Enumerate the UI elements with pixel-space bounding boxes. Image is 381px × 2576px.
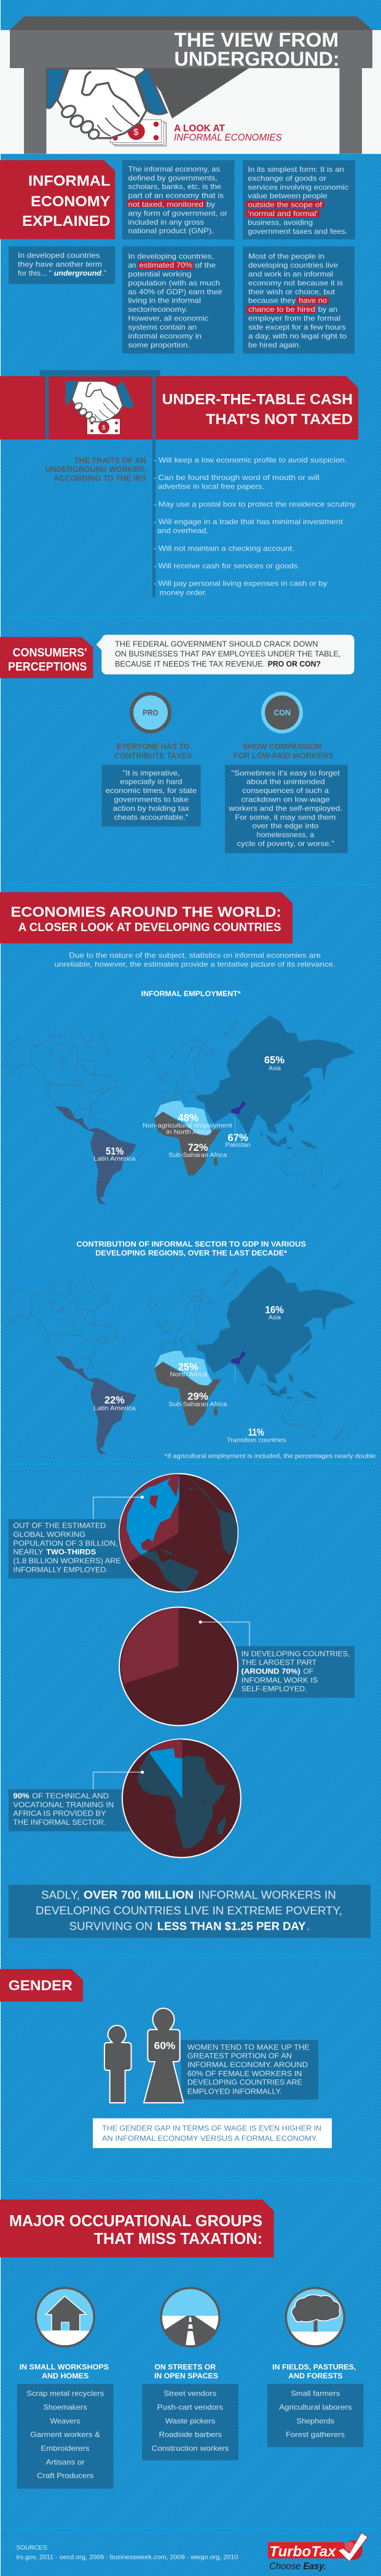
label: transition countries xyxy=(227,1427,286,1444)
column heading: streets xyxy=(154,2363,218,2380)
section: major occupational groups xyxy=(0,2200,364,2489)
callout text: two-thirds: (1.8 BILLION WORKERS) ARE xyxy=(13,1557,121,1565)
con heading: FOR LOW-PAID WORKERS xyxy=(234,751,334,760)
subtitle xyxy=(174,123,282,143)
panel: why people work informally: developing countries live xyxy=(248,261,338,269)
label: latin america: 22% xyxy=(104,1395,125,1406)
traits list xyxy=(154,455,357,597)
heading: THAT MISS TAXATION: xyxy=(94,2229,262,2248)
icon: man xyxy=(104,2025,132,2103)
traits label: UNDERGROUND WORKER, xyxy=(45,465,146,474)
label: latin america xyxy=(93,1146,136,1162)
heading: INFORMAL xyxy=(28,173,111,190)
icon: tree xyxy=(285,2287,345,2347)
panel: definition: by xyxy=(206,200,215,209)
panel: street occupations: Waste pickers xyxy=(165,2416,215,2425)
column heading: workshops: AND HOMES xyxy=(42,2372,88,2380)
callout text: two-thirds: INFORMALLY EMPLOYED. xyxy=(13,1565,108,1574)
panel: simplest form: services involving economic xyxy=(248,183,348,191)
speech bubble: BECAUSE IT NEEDS THE TAX REVENUE. xyxy=(115,660,265,668)
label: transition countries: 11% xyxy=(248,1427,264,1438)
panel: field occupations: Forest gatherers xyxy=(286,2431,345,2439)
section: under-the-table cash xyxy=(0,370,358,597)
panel: women statistic: 60% OF FEMALE WORKERS IN xyxy=(187,2069,302,2078)
panel: extreme poverty statement: SADLY, xyxy=(41,1889,80,1901)
pro heading xyxy=(114,742,192,760)
traits list: Will keep a low economic profile to avoid suspicion. xyxy=(159,455,347,464)
traits list: - xyxy=(154,500,156,508)
label: sub-saharan africa xyxy=(168,1142,227,1159)
panel: developing countries: some proportion. xyxy=(128,341,190,349)
sources: SOURCES: xyxy=(16,2544,49,2551)
label: sub-saharan africa: 29% xyxy=(187,1391,208,1402)
panel: con quote: about the unintended xyxy=(246,778,325,786)
traits label: ACCORDING TO THE IRS xyxy=(54,474,146,483)
speech bubble: ON BUSINESSES THAT PAY EMPLOYEES UNDER THE TABLE, xyxy=(115,650,340,659)
heading: CONSUMERS' xyxy=(13,646,87,659)
label: sub-saharan africa: Sub-Saharan Africa xyxy=(168,1401,227,1408)
icon: con circle: CON xyxy=(274,708,291,717)
icon: pro circle xyxy=(130,692,171,733)
panel: con quote: For some, it may send them xyxy=(235,813,336,821)
panel: why people work informally: side except for a few hours xyxy=(248,323,346,331)
panel: simplest form: government taxes and fees. xyxy=(248,227,347,236)
panel: extreme poverty statement: SURVIVING ON xyxy=(69,1920,152,1932)
panel: street occupations xyxy=(142,2384,238,2460)
callout text: training: VOCATIONAL TRAINING IN xyxy=(13,1800,114,1809)
speech bubble: THE FEDERAL GOVERNMENT SHOULD CRACK DOWN xyxy=(115,640,318,648)
column heading: workshops xyxy=(20,2363,109,2380)
speech bubble: PRO OR CON? xyxy=(268,660,321,668)
label: transition countries: Transition countries xyxy=(227,1437,286,1444)
con heading: SHOW COMPASSION xyxy=(243,742,321,751)
panel: definition: any form of government, or xyxy=(128,209,227,217)
heading xyxy=(0,892,293,943)
heading: UNDER-THE-TABLE CASH xyxy=(162,391,353,408)
traits list: advertise in local free papers. xyxy=(158,482,264,491)
panel: pro quote: cheats accountable." xyxy=(114,813,188,821)
callout line xyxy=(93,1496,144,1519)
callout line xyxy=(93,1771,144,1789)
panel: field occupations xyxy=(267,2384,364,2447)
label: north africa xyxy=(143,1113,232,1135)
icon: cash bills: $ xyxy=(133,127,139,137)
panel: why people work informally xyxy=(243,247,355,354)
section: economies around the world xyxy=(0,892,375,1460)
traits list: - xyxy=(154,544,156,552)
panel: workshop occupations: Artisans or xyxy=(46,2458,85,2466)
panel: extreme poverty statement: . xyxy=(307,1920,310,1932)
panel: con quote: workers and the self-employed. xyxy=(228,804,342,813)
panel: simplest form: outside the scope of xyxy=(248,200,323,209)
icon: con circle xyxy=(261,692,303,733)
panel: street occupations: Roadside barbers xyxy=(159,2431,222,2439)
panel: simplest form: exchange of goods or xyxy=(248,174,326,182)
panel: con quote xyxy=(225,765,348,853)
callout text: self-employed: SELF-EMPLOYED. xyxy=(242,1685,307,1693)
heading: ECONOMIES AROUND THE WORLD: xyxy=(10,904,281,920)
callout panel: training in Africa xyxy=(9,1789,141,1831)
callout text: training: THE INFORMAL SECTOR. xyxy=(13,1818,106,1827)
map heading: contribution to GDP: DEVELOPING REGIONS, OVER THE LAST DECADE* xyxy=(95,1249,287,1258)
panel: workshop occupations: Embroiderers xyxy=(41,2444,90,2453)
traits list: Will receive cash for services or goods. xyxy=(158,562,300,570)
label: pakistan xyxy=(225,1132,251,1148)
traits label: THE TRAITS OF AN xyxy=(74,455,146,465)
callout text: two-thirds xyxy=(13,1522,121,1574)
callout: gender wage gap xyxy=(93,2118,332,2148)
panel: definition: national product (GNP). xyxy=(128,226,214,235)
globe: Africa 90 percent pie xyxy=(122,1737,241,1857)
panel: why people work informally: Most of the people in xyxy=(248,252,324,261)
panel: field occupations: Small farmers xyxy=(291,2389,340,2398)
heading: MAJOR OCCUPATIONAL GROUPS xyxy=(9,2211,262,2230)
logo: TurboTax: TurboTax xyxy=(269,2543,337,2560)
traits list: - xyxy=(154,473,156,482)
panel: con quote: cycle of poverty, or worse." xyxy=(237,839,334,848)
subtitle: A LOOK AT xyxy=(174,123,226,134)
footnote: *If agricultural employment is included, the percentages nearly double xyxy=(165,1453,375,1460)
label: sub-saharan africa xyxy=(168,1391,227,1408)
panel: developing countries: informal economy in xyxy=(128,331,202,340)
callout text: self-employed: IN DEVELOPING COUNTRIES, xyxy=(242,1649,350,1658)
panel: developed countries term: underground xyxy=(54,269,102,277)
panel: extreme poverty statement: OVER 700 MILLION xyxy=(84,1889,194,1901)
logo: TurboTax xyxy=(268,2533,367,2572)
panel: workshop occupations xyxy=(17,2384,114,2489)
label: north africa: 25% xyxy=(178,1362,198,1373)
panel: con quote: "Sometimes it's easy to forget xyxy=(231,768,340,777)
label: latin america: 51% xyxy=(106,1146,124,1157)
panel: developed countries term: ." xyxy=(102,269,106,277)
callout text: training: 90% xyxy=(13,1792,29,1800)
sources xyxy=(16,2544,238,2561)
panel: developing countries: However, all economic xyxy=(128,314,208,323)
traits list: - xyxy=(154,562,156,570)
intro text: unreliable, however, the estimates provide a tentative picture of its relevance. xyxy=(55,960,336,969)
callout panel: global working population xyxy=(9,1519,141,1579)
panel: developing countries: an xyxy=(128,261,136,269)
label: asia xyxy=(265,1304,284,1321)
panel: definition xyxy=(122,160,235,239)
label: north africa xyxy=(170,1362,207,1379)
traits list: - xyxy=(154,455,156,464)
panel: definition: The informal economy, as xyxy=(128,164,220,173)
icon: small cash xyxy=(87,419,120,434)
traits list: May use a postal box to protect the residence scrutiny. xyxy=(159,500,357,508)
heading xyxy=(0,637,93,678)
panel: definition: part of an economy that is xyxy=(128,191,224,200)
heading: A CLOSER LOOK AT DEVELOPING COUNTRIES xyxy=(18,921,281,934)
callout text: training: OF TECHNICAL AND xyxy=(32,1792,109,1800)
label: latin america: Latin America xyxy=(93,1404,136,1412)
panel: extreme poverty statement: LESS THAN $1.25 PER DAY xyxy=(157,1920,305,1932)
panel: developing countries: In developing countries, xyxy=(128,252,214,261)
callout text: self-employed: INFORMAL WORK IS xyxy=(242,1676,318,1684)
panel: developed countries term: for this... " xyxy=(18,269,52,277)
panel: field occupations: Agricultural laborers xyxy=(279,2403,352,2412)
column heading: streets: IN OPEN SPACES xyxy=(154,2372,218,2380)
panel: developing countries: potential working xyxy=(128,270,192,279)
callout text: two-thirds: TWO-THIRDS xyxy=(46,1548,96,1557)
panel: women statistic: EMPLOYED INFORMALLY. xyxy=(187,2087,282,2095)
panel: definition: not taxed, monitored xyxy=(128,200,203,209)
sources: irs.gov, 2011 · oecd.org, 2009 · businessweek.com, 2009 · wiego.org, 2010 xyxy=(16,2553,238,2561)
header: table illustration and title xyxy=(0,17,381,154)
panel: field occupations: Shepherds xyxy=(296,2416,334,2425)
callout text: self-employed: THE LARGEST PART xyxy=(242,1658,317,1667)
traits list: - xyxy=(154,517,156,526)
callout: gender wage gap: AN INFORMAL ECONOMY VERSUS A FORMAL ECONOMY. xyxy=(102,2134,318,2143)
heading: PERCEPTIONS xyxy=(8,660,87,673)
panel: definition: scholars, banks, etc. is the xyxy=(128,182,221,191)
icon: small handshake xyxy=(66,381,135,424)
world map: informal employment xyxy=(6,1015,355,1204)
traits list: Will pay personal living expenses in cash or by xyxy=(158,579,328,588)
traits list: Will engage in a trade that has minimal investment xyxy=(159,517,344,526)
label: sub-saharan africa: Sub-Saharan Africa xyxy=(168,1151,227,1159)
panel: why people work informally: their wish or choice, but xyxy=(248,287,336,296)
callout text: two-thirds: GLOBAL WORKING xyxy=(13,1530,85,1539)
panel: con quote: consequences of such a xyxy=(242,786,329,795)
panel: women statistic xyxy=(181,2040,318,2100)
panel: developing countries: living in the informal xyxy=(128,296,201,305)
callout line xyxy=(199,1620,249,1646)
traits list: and overhead. xyxy=(157,526,208,535)
column heading: fields xyxy=(272,2363,356,2380)
section: gender xyxy=(0,1969,332,2148)
panel: workshop occupations: Scrap metal recyclers xyxy=(26,2389,104,2398)
panel: why people work informally: economy not because it is xyxy=(248,279,343,287)
panel: developed countries term xyxy=(9,247,115,284)
panel: developing countries: of the xyxy=(195,261,216,269)
traits list: - xyxy=(154,579,156,588)
panel: con quote: crackdown on low-wage xyxy=(242,795,330,803)
panel: street occupations: Push-cart vendors xyxy=(157,2403,223,2412)
heading: THAT'S NOT TAXED xyxy=(206,411,353,428)
panel: developing countries: systems contain an xyxy=(128,323,197,331)
panel: why people work informally: be hired again. xyxy=(248,341,301,349)
callout text: self-employed: OF xyxy=(304,1667,313,1676)
panel: street occupations: Construction workers xyxy=(152,2444,229,2453)
callout text: two-thirds: NEARLY xyxy=(13,1548,43,1557)
panel: women statistic: WOMEN TEND TO MAKE UP THE xyxy=(187,2043,310,2051)
label: north africa: North Africa xyxy=(170,1371,207,1379)
pro heading: EVERYONE HAS TO xyxy=(117,742,189,751)
panel: developed countries term: In developed countries xyxy=(18,251,100,260)
column heading: fields: AND FORESTS xyxy=(288,2372,343,2380)
pie globe: 70 percent xyxy=(119,1607,238,1726)
subtitle: INFORMAL ECONOMIES xyxy=(174,133,282,143)
panel: why people work informally: and work in an informal xyxy=(248,270,333,279)
heading: GENDER xyxy=(9,1978,73,1994)
heading xyxy=(0,2200,274,2257)
globe: two-thirds pie over Americas xyxy=(117,1473,238,1592)
callout text: training: AFRICA IS PROVIDED BY xyxy=(13,1809,106,1818)
panel: con quote: over the edge into xyxy=(252,822,319,830)
map heading: contribution to GDP xyxy=(76,1240,306,1258)
heading: ECONOMY xyxy=(31,193,111,210)
panel: women statistic: DEVELOPING COUNTRIES ARE xyxy=(187,2078,302,2087)
map heading: informal employment: INFORMAL EMPLOYMENT* xyxy=(141,989,241,998)
column heading: streets: ON STREETS OR xyxy=(155,2363,216,2372)
title: THE VIEW FROM xyxy=(175,29,339,51)
map heading: contribution to GDP: CONTRIBUTION OF INFORMAL SECTOR TO GDP IN VARIOUS xyxy=(76,1240,306,1248)
icon: road xyxy=(160,2287,221,2347)
intro text: Due to the nature of the subject, statistics on informal economies are xyxy=(69,951,321,960)
traits list: Can be found through word of mouth or will xyxy=(158,473,320,482)
panel: workshop occupations: Weavers xyxy=(50,2416,80,2425)
panel: why people work informally: because they xyxy=(248,296,296,305)
panel: simplest form: value between people xyxy=(248,191,328,200)
column heading: workshops: IN SMALL WORKSHOPS xyxy=(20,2363,109,2372)
label: north africa: in North Africa xyxy=(166,1128,211,1135)
panel: pro quote: economic times, for state xyxy=(106,786,197,795)
label: asia: Asia xyxy=(269,1314,281,1321)
panel: developing countries: estimated 70% xyxy=(139,261,192,269)
label: north africa: Non-agricultural employment xyxy=(143,1122,232,1129)
title xyxy=(175,29,339,70)
panel: workshop occupations: Shoemakers xyxy=(43,2403,87,2412)
callout: gender wage gap: THE GENDER GAP IN TERMS OF WAGE IS EVEN HIGHER IN xyxy=(102,2124,321,2133)
world map: contribution to GDP xyxy=(6,1266,355,1454)
panel: street occupations: Street vendors xyxy=(163,2389,216,2398)
title: UNDERGROUND: xyxy=(175,48,339,70)
label: north africa: 48% xyxy=(178,1113,198,1124)
panel: workshop occupations: Garment workers & xyxy=(30,2431,100,2439)
panel: simplest form: In its simplest form: It is an xyxy=(248,165,344,174)
callout text: self-employed: (AROUND 70%) xyxy=(242,1667,300,1676)
panel: women statistic: GREATEST PORTION OF AN xyxy=(187,2052,292,2060)
label: asia: Asia xyxy=(269,1064,281,1072)
label: sub-saharan africa: 72% xyxy=(188,1142,208,1153)
con heading xyxy=(234,742,334,760)
table shadow xyxy=(143,68,249,118)
panel: pro quote: "It is imperative, xyxy=(123,768,180,777)
panel: pro quote: governments to take xyxy=(114,795,189,803)
callout text: self-employed xyxy=(242,1649,350,1693)
panel: why people work informally: employer from the formal xyxy=(248,314,340,323)
panel: developing countries xyxy=(122,247,235,354)
icon: cash bills xyxy=(110,120,166,146)
panel: why people work informally: by an xyxy=(318,305,337,314)
heading xyxy=(0,1969,83,2002)
panel: why people work informally: a day, with no legal right to xyxy=(248,331,347,340)
label: asia: 65% xyxy=(264,1055,285,1066)
panel: developing countries: population (with as much xyxy=(128,279,220,287)
icon: pro circle: PRO xyxy=(143,708,159,717)
traits list: Will not maintain a checking account. xyxy=(159,544,294,552)
panel: why people work informally: chance to be hired xyxy=(248,305,315,314)
label: asia xyxy=(264,1055,285,1072)
panel: women statistic: INFORMAL ECONOMY. AROUND xyxy=(187,2060,308,2069)
panel: developing countries: sector/economy. xyxy=(128,305,187,314)
panel: con quote: homelessness, a xyxy=(257,830,315,839)
intro text xyxy=(55,951,336,969)
banner xyxy=(0,376,358,439)
panel: pro quote xyxy=(101,765,201,827)
speech bubble xyxy=(96,635,354,675)
label: latin america xyxy=(93,1395,136,1412)
callout text: two-thirds: POPULATION OF 3 BILLION, xyxy=(13,1539,117,1547)
panel: definition: included in any gross xyxy=(128,218,204,226)
traits list: money order. xyxy=(160,588,207,597)
callout panel: self-employed xyxy=(227,1646,355,1698)
logo: TurboTax: Easy. xyxy=(303,2561,326,2572)
label: pakistan: 67% xyxy=(227,1132,248,1143)
icon: woman with 60% xyxy=(144,2008,183,2103)
column heading: fields: IN FIELDS, PASTURES, xyxy=(272,2363,356,2372)
panel: developed countries term: they have another term xyxy=(18,260,102,269)
panel: extreme poverty statement: DEVELOPING COUNTRIES LIVE IN EXTREME POVERTY, xyxy=(36,1905,342,1917)
panel: definition: defined by governments, xyxy=(128,174,218,182)
heading xyxy=(0,160,115,239)
panel: simplest form: business, avoiding xyxy=(248,218,313,226)
label: asia: 16% xyxy=(265,1304,284,1315)
traits label xyxy=(45,455,146,483)
icon: small cash: $ xyxy=(102,425,106,431)
table xyxy=(10,17,372,154)
label: latin america: Latin America xyxy=(93,1155,136,1162)
pro heading: CONTRIBUTE TAXES xyxy=(114,751,192,760)
heading: EXPLAINED xyxy=(22,213,111,230)
small table xyxy=(40,370,160,597)
panel: why people work informally: have no xyxy=(299,296,327,305)
section: informal economy explained xyxy=(0,160,355,354)
heading xyxy=(162,391,353,428)
panel: pro quote: action by holding tax xyxy=(113,804,189,813)
panel: simplest form: 'normal and formal' xyxy=(248,209,318,218)
panel: simplest form xyxy=(243,160,355,239)
section: consumers' perceptions xyxy=(0,635,354,853)
icon: handshake xyxy=(47,69,167,141)
callout text: two-thirds: OUT OF THE ESTIMATED xyxy=(13,1522,106,1530)
panel: extreme poverty statement: INFORMAL WORKERS IN xyxy=(198,1889,336,1901)
icon: house xyxy=(34,2287,96,2347)
panel: developing countries: as 40% of GDP) earn their xyxy=(128,287,222,296)
panel: extreme poverty statement xyxy=(9,1885,371,1938)
panel: pro quote: especially in hard xyxy=(120,778,183,786)
label: pakistan: Pakistan xyxy=(225,1141,251,1148)
logo: TurboTax: Choose xyxy=(269,2561,300,2572)
panel: workshop occupations: Craft Producers xyxy=(37,2472,93,2480)
callout text: training xyxy=(13,1792,114,1827)
icon: woman with 60%: 60% xyxy=(154,2040,176,2051)
